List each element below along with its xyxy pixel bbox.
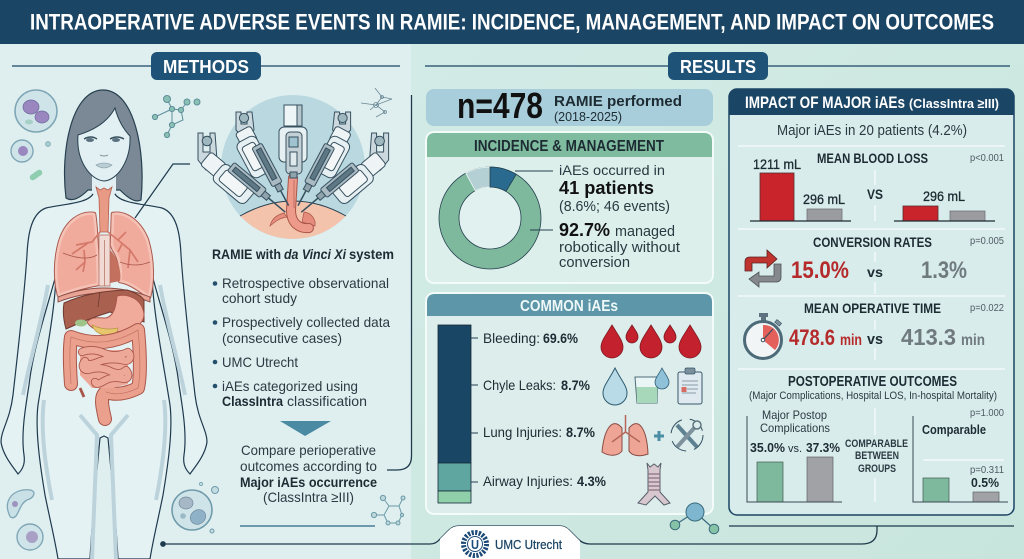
methods bullet list: (consecutive cases) [222, 330, 342, 346]
chart: major postop complications [747, 408, 842, 502]
incidence text: iAEs occurred in [559, 162, 665, 178]
pancreas and gallbladder [92, 325, 118, 336]
panel: n=478: n=478 [457, 85, 543, 126]
chart: comparable outcomes: Comparable [922, 422, 986, 437]
incidence text: 92.7% [559, 220, 610, 240]
neck [92, 170, 116, 196]
methods bullet list: Prospectively collected data [222, 314, 390, 330]
bronchi [72, 232, 138, 272]
trachea [96, 187, 112, 232]
section: mean operative time: MEAN OPERATIVE TIME [804, 300, 941, 316]
left arms [198, 112, 293, 216]
chart: comparable outcomes: p=1.000 [970, 408, 1004, 419]
panel: common iAEs [426, 293, 713, 514]
airway injuries label: Airway Injuries: [483, 473, 573, 489]
stomach [87, 295, 144, 332]
illustration: human body with organs [1, 90, 207, 559]
liver [63, 290, 144, 329]
panel: impact of major iAEs: (ClassIntra ≥III) [909, 96, 999, 111]
diaphragm [58, 288, 150, 302]
methods bullet list: cohort study [222, 290, 297, 306]
chart: major postop complications: Major Postop [762, 408, 827, 422]
text: comparable between groups: COMPARABLE [845, 438, 908, 450]
heart shadow [110, 250, 120, 283]
callout line from lung to robot [135, 164, 190, 218]
chart: comparable outcomes: p=0.311 [970, 465, 1004, 476]
incidence text: managed [615, 224, 675, 240]
icon: blood drops [601, 325, 701, 358]
text: comparable between groups: BETWEEN [855, 450, 899, 462]
text: RAMIE with da Vinci Xi system [212, 246, 394, 262]
icon: molecule upper right [361, 88, 392, 117]
text: compare outcomes: Compare perioperative [241, 442, 376, 458]
connector from methods to results [387, 95, 412, 470]
panel: incidence and management [426, 132, 713, 283]
bleeding label: Bleeding: [483, 330, 540, 346]
arrow: down triangle [280, 421, 331, 436]
lung injuries label: Lung Injuries: [483, 424, 562, 440]
panel: impact of major iAEs: IMPACT OF MAJOR iAEs [745, 93, 905, 112]
heading: methods [12, 52, 400, 80]
section: mean operative time: 413.3 [901, 324, 956, 350]
surgical field [240, 201, 346, 239]
chyle leaks label: 8.7% [561, 377, 590, 393]
text: compare outcomes [240, 442, 377, 505]
icon: molecule lower [371, 495, 405, 525]
chart: mean blood loss: 296 mL [923, 188, 965, 204]
chart: comparable outcomes [913, 408, 1008, 502]
icon: cells upper left [11, 90, 57, 181]
section: conversion rates: 15.0% [791, 257, 849, 284]
panel: incidence and management: INCIDENCE & MANAGEMENT [474, 138, 664, 155]
esophagus [99, 235, 110, 286]
icon: conversion arrows [745, 250, 781, 287]
bleeding label [483, 330, 578, 346]
chart: major postop complications: 37.3% [806, 440, 840, 455]
text: comparable between groups [845, 438, 908, 475]
section: postoperative outcomes: (Major Complications, Hospital LOS, In-hospital Mortality) [749, 390, 997, 402]
section: conversion rates: p=0.005 [970, 236, 1004, 247]
text: compare outcomes: outcomes according to [240, 458, 377, 474]
illustration: robotic da Vinci arms over surgical field [198, 95, 389, 239]
icon: cells lower left [7, 490, 43, 550]
panel: common iAEs: COMMON iAEs [520, 298, 618, 315]
hair [65, 90, 142, 201]
methods bullet list: iAEs categorized using [222, 378, 358, 394]
right arms [293, 112, 389, 216]
icon: chyle drop, beaker, clipboard [603, 368, 702, 405]
incidence text: robotically without [559, 240, 680, 256]
chart: major postop complications: 35.0% [750, 440, 785, 455]
lung injuries label: 8.7% [566, 424, 595, 440]
chart: mean blood loss: p<0.001 [970, 153, 1004, 164]
section: mean operative time [744, 300, 1004, 358]
panel: n=478: RAMIE performed [554, 93, 682, 110]
panel: n=478 [426, 85, 713, 126]
center arm [279, 105, 307, 178]
section: postoperative outcomes [747, 374, 1008, 502]
chart: mean blood loss: VS [867, 186, 883, 202]
donut chart [439, 167, 541, 269]
icon: UMC Utrecht seal: U [471, 537, 479, 552]
footer logo tab: UMC Utrecht [495, 537, 562, 552]
text: RAMIE with da Vinci Xi system: RAMIE with [212, 246, 281, 262]
text: compare outcomes: (ClassIntra ≥III) [263, 489, 354, 505]
panel: n=478: (2018-2025) [554, 110, 622, 124]
body silhouette [1, 192, 207, 559]
text: comparable between groups: GROUPS [858, 463, 896, 475]
icon: stopwatch [744, 313, 782, 358]
small intestine [80, 350, 128, 388]
chart: major postop complications: vs. [788, 443, 802, 455]
chart: mean blood loss: 1211 mL [753, 156, 801, 172]
section: mean operative time: 478.6 [789, 325, 835, 350]
incidence text: 41 patients [559, 178, 654, 198]
icon: molecule upper [152, 96, 200, 138]
icon: molecule between panels [670, 503, 719, 534]
text: compare outcomes: Major iAEs occurrence [240, 474, 377, 490]
footer connector lines [161, 526, 1014, 546]
section: conversion rates [745, 234, 1004, 287]
methods bullet list [213, 275, 390, 409]
icon: cell lower right [172, 482, 218, 533]
section: postoperative outcomes: POSTOPERATIVE OUTCOMES [788, 374, 957, 390]
section: conversion rates: CONVERSION RATES [813, 234, 932, 250]
methods bullet list: UMC Utrecht [222, 354, 298, 370]
methods bullet list: ClassIntra [222, 393, 283, 409]
methods bullet list: classification [287, 393, 367, 409]
stacked bar [438, 325, 471, 503]
section: mean operative time: min [840, 332, 862, 349]
chart: mean blood loss: MEAN BLOOD LOSS [817, 150, 928, 166]
heading: methods: METHODS [163, 57, 249, 77]
section: conversion rates: 1.3% [921, 257, 967, 284]
incidence text: conversion [559, 255, 630, 271]
esophagus [291, 178, 309, 228]
face [78, 108, 130, 181]
lungs [56, 214, 152, 297]
chyle leaks label: Chyle Leaks: [483, 377, 556, 393]
icon: lungs, plus and wrench [602, 415, 703, 456]
incidence text: (8.6%; 46 events) [559, 199, 670, 215]
section: conversion rates: vs [867, 264, 883, 280]
text: RAMIE with da Vinci Xi system: system [349, 246, 394, 262]
chart: mean blood loss: 296 mL [803, 191, 845, 207]
title banner [0, 0, 1024, 44]
text: RAMIE with da Vinci Xi system: da Vinci Xi [284, 246, 347, 262]
section: mean operative time: min [961, 332, 985, 349]
incidence text [559, 162, 680, 271]
large intestine [70, 330, 140, 419]
airway injuries label: 4.3% [577, 473, 606, 489]
chart: major postop complications: Complications [760, 421, 830, 435]
chart: mean blood loss [750, 150, 1004, 221]
chart: comparable outcomes: 0.5% [971, 475, 999, 490]
section: mean operative time: vs [867, 331, 883, 348]
methods bullet list: Retrospective observational [222, 275, 389, 291]
panel: impact of major iAEs: Major iAEs in 20 patients (4.2%) [777, 122, 967, 139]
panel: impact of major iAEs [729, 89, 1014, 515]
icon: trachea [638, 463, 670, 505]
bleeding label: 69.6% [543, 330, 578, 346]
heading: results: RESULTS [680, 57, 756, 77]
footer logo tab [440, 526, 580, 559]
body shading [23, 285, 185, 559]
section: mean operative time: p=0.022 [970, 303, 1004, 314]
heading: results [425, 52, 1010, 80]
lungs outer pleura [56, 214, 152, 297]
